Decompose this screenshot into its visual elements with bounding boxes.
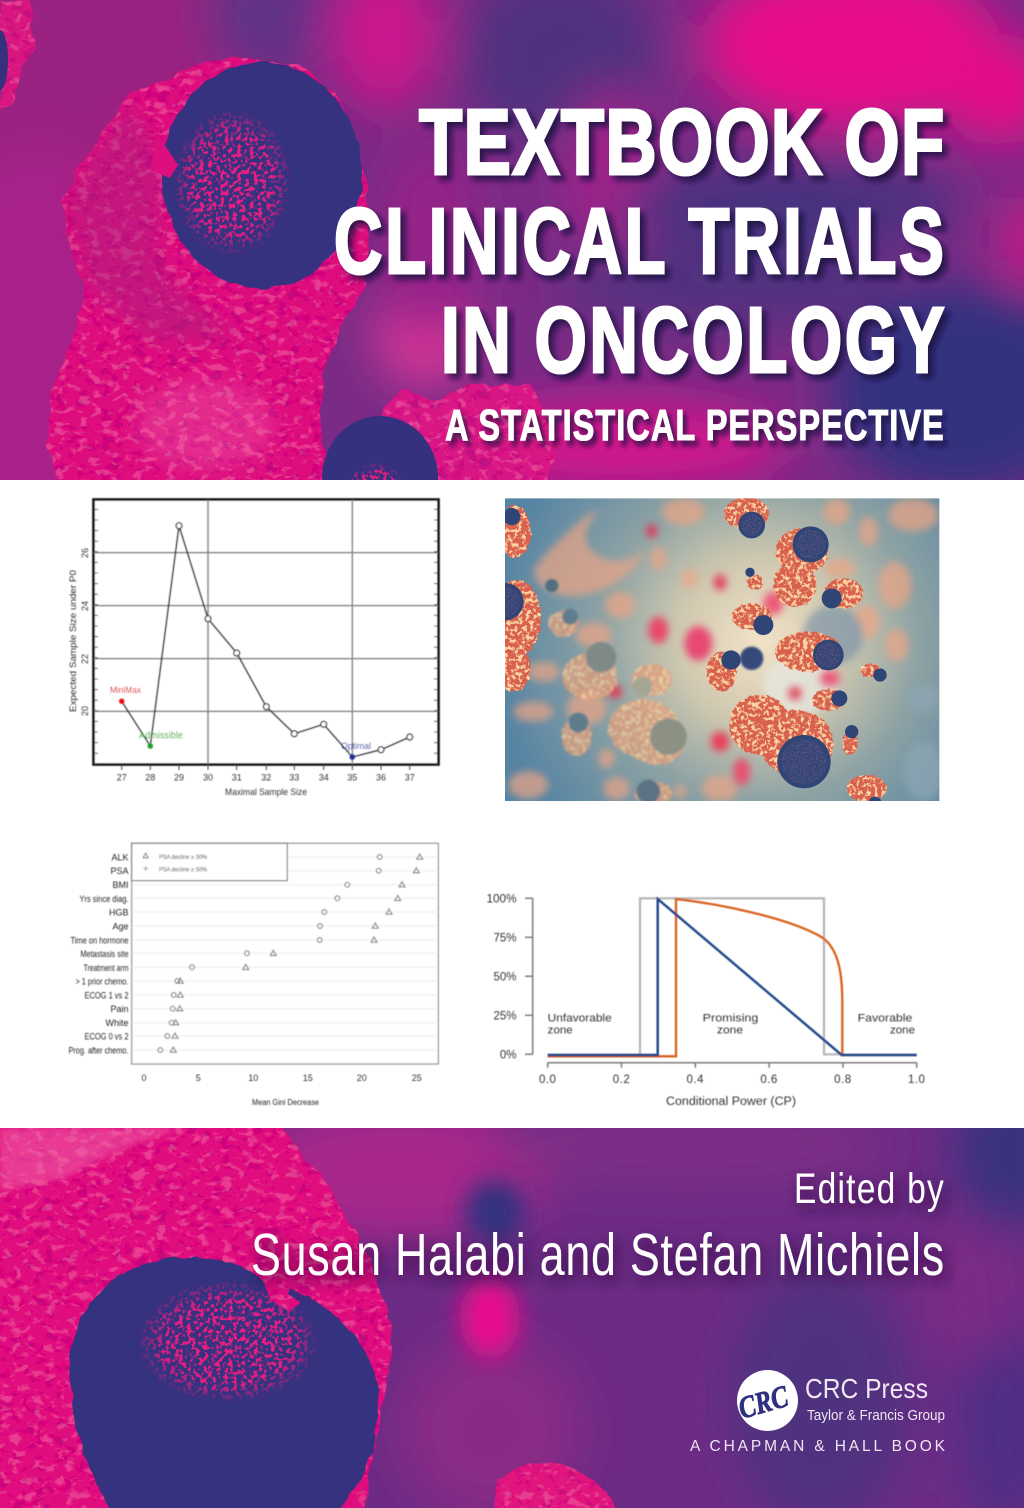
logo: CRC Press bbox=[690, 1370, 946, 1455]
title: CLINICAL TRIALS bbox=[334, 190, 944, 294]
chart: mean Gini decrease dot plot: Prog. after chemo. bbox=[68, 1046, 128, 1056]
chart: conditional power zones: 0.4 bbox=[687, 1074, 704, 1086]
chart: mean Gini decrease dot plot: HGB bbox=[109, 908, 128, 918]
chart: expected sample size line plot: Admissible bbox=[139, 730, 183, 742]
chart: mean Gini decrease dot plot: 20 bbox=[357, 1073, 367, 1083]
chart: expected sample size line plot: 29 bbox=[174, 772, 184, 782]
chart: expected sample size line plot bbox=[68, 499, 438, 798]
subtitle: A STATISTICAL PERSPECTIVE bbox=[445, 401, 944, 450]
chart: conditional power zones bbox=[486, 894, 925, 1108]
chart: expected sample size line plot: 28 bbox=[145, 772, 155, 782]
title bbox=[334, 90, 944, 393]
chart: conditional power zones: 25% bbox=[493, 1010, 516, 1022]
chart: conditional power zones: Promising bbox=[703, 1013, 758, 1025]
icon: bottom small cell fragment bbox=[494, 1462, 615, 1508]
chart: expected sample size line plot: 30 bbox=[203, 772, 213, 782]
chart: conditional power zones: 50% bbox=[493, 972, 516, 984]
chart: mean Gini decrease dot plot bbox=[68, 843, 438, 1107]
chart: conditional power zones: 0.0 bbox=[539, 1074, 556, 1086]
chart: mean Gini decrease dot plot: 5 bbox=[196, 1073, 201, 1083]
chart: mean Gini decrease dot plot: White bbox=[105, 1018, 128, 1028]
chart: mean Gini decrease dot plot: Metastasis site bbox=[80, 949, 128, 959]
top band: magenta cell artwork bbox=[0, 0, 1024, 480]
chart: mean Gini decrease dot plot: BMI bbox=[112, 880, 128, 890]
chart: conditional power zones: Conditional Power (CP) bbox=[666, 1096, 796, 1108]
pale out-of-focus cells bbox=[545, 579, 687, 805]
chart: expected sample size line plot: 36 bbox=[376, 772, 386, 782]
logo: CRC Press: Taylor & Francis Group bbox=[807, 1407, 945, 1424]
chart: conditional power zones: 0.8 bbox=[834, 1074, 852, 1086]
legend: PSA decline ≥ 30% bbox=[159, 855, 208, 861]
chart: conditional power zones: 75% bbox=[493, 932, 516, 944]
photo: cancer cells bbox=[486, 495, 945, 810]
chart: mean Gini decrease dot plot: 0 bbox=[141, 1073, 147, 1083]
chart: mean Gini decrease dot plot: 10 bbox=[248, 1073, 258, 1083]
icon: bottom large cancer cell bbox=[0, 1120, 392, 1508]
chart: conditional power zones: 100% bbox=[486, 894, 516, 906]
logo: CRC Press: CRC bbox=[734, 1378, 792, 1426]
chart: expected sample size line plot: 33 bbox=[289, 772, 299, 782]
chart: expected sample size line plot: 35 bbox=[347, 772, 357, 782]
editors: Edited by bbox=[794, 1165, 944, 1213]
chart: expected sample size line plot: 37 bbox=[405, 772, 415, 782]
chart: expected sample size line plot: 24 bbox=[80, 601, 90, 611]
chart: expected sample size line plot: 32 bbox=[261, 772, 271, 782]
chart: mean Gini decrease dot plot: 15 bbox=[303, 1073, 313, 1083]
icon: large cancer cell bbox=[48, 57, 368, 490]
chart: conditional power zones: Favorable bbox=[858, 1013, 912, 1025]
title: IN ONCOLOGY bbox=[441, 289, 944, 393]
chart: expected sample size line plot: 34 bbox=[319, 772, 329, 782]
chart: expected sample size line plot: 26 bbox=[80, 548, 90, 558]
editors bbox=[251, 1165, 944, 1289]
title: TEXTBOOK OF bbox=[419, 90, 944, 194]
chart: mean Gini decrease dot plot: Pain bbox=[110, 1004, 128, 1014]
chart: conditional power zones: 0.2 bbox=[613, 1074, 630, 1086]
chart: conditional power zones: zone bbox=[548, 1024, 573, 1036]
logo: CRC Press: A CHAPMAN & HALL BOOK bbox=[690, 1438, 946, 1455]
chart: mean Gini decrease dot plot: ECOG 1 vs 2 bbox=[84, 990, 128, 1000]
chart: mean Gini decrease dot plot: PSA bbox=[110, 866, 128, 876]
chart: mean Gini decrease dot plot: > 1 prior chemo. bbox=[76, 976, 128, 986]
in-focus cells bbox=[493, 497, 887, 802]
logo: CRC Press: CRC Press bbox=[805, 1373, 928, 1404]
chart: expected sample size line plot: 31 bbox=[232, 772, 242, 782]
chart: mean Gini decrease dot plot: ALK bbox=[111, 852, 128, 862]
chart: mean Gini decrease dot plot: Mean Gini Decrease bbox=[252, 1098, 320, 1107]
chart: expected sample size line plot: 27 bbox=[117, 772, 127, 782]
bottom band: magenta cell artwork bbox=[0, 1128, 1024, 1508]
chart: mean Gini decrease dot plot: Treatment arm bbox=[84, 963, 128, 973]
chart: mean Gini decrease dot plot: ECOG 0 vs 2 bbox=[84, 1032, 128, 1042]
chart: expected sample size line plot: Optimal bbox=[341, 741, 371, 752]
icon: small cancer cell bbox=[322, 383, 562, 480]
icon: corner cell fragment bbox=[0, 0, 34, 110]
chart: conditional power zones: zone bbox=[717, 1024, 743, 1036]
chart: conditional power zones: 0.6 bbox=[760, 1074, 778, 1086]
chart: mean Gini decrease dot plot: Time on hormone bbox=[70, 936, 128, 946]
chart: conditional power zones: zone bbox=[890, 1024, 915, 1036]
legend bbox=[132, 843, 287, 881]
chart: expected sample size line plot: 22 bbox=[80, 654, 90, 664]
legend: PSA decline ≥ 50% bbox=[159, 867, 208, 873]
chart: conditional power zones: 1.0 bbox=[908, 1074, 925, 1086]
chart: expected sample size line plot: 20 bbox=[80, 706, 90, 716]
chart: mean Gini decrease dot plot: 25 bbox=[412, 1073, 422, 1083]
chart: conditional power zones: Unfavorable bbox=[548, 1013, 612, 1025]
chart: expected sample size line plot: Expected Sample Size under P0 bbox=[68, 570, 79, 712]
chart: mean Gini decrease dot plot: Yrs since diag. bbox=[80, 894, 128, 904]
chart: mean Gini decrease dot plot: Age bbox=[112, 922, 128, 932]
chart: expected sample size line plot: Maximal Sample Size bbox=[225, 787, 307, 798]
chart: expected sample size line plot: MiniMax bbox=[110, 685, 141, 696]
editors: Susan Halabi and Stefan Michiels bbox=[251, 1223, 944, 1289]
cell nuclei bbox=[486, 508, 887, 810]
chart: conditional power zones: 0% bbox=[500, 1050, 516, 1062]
